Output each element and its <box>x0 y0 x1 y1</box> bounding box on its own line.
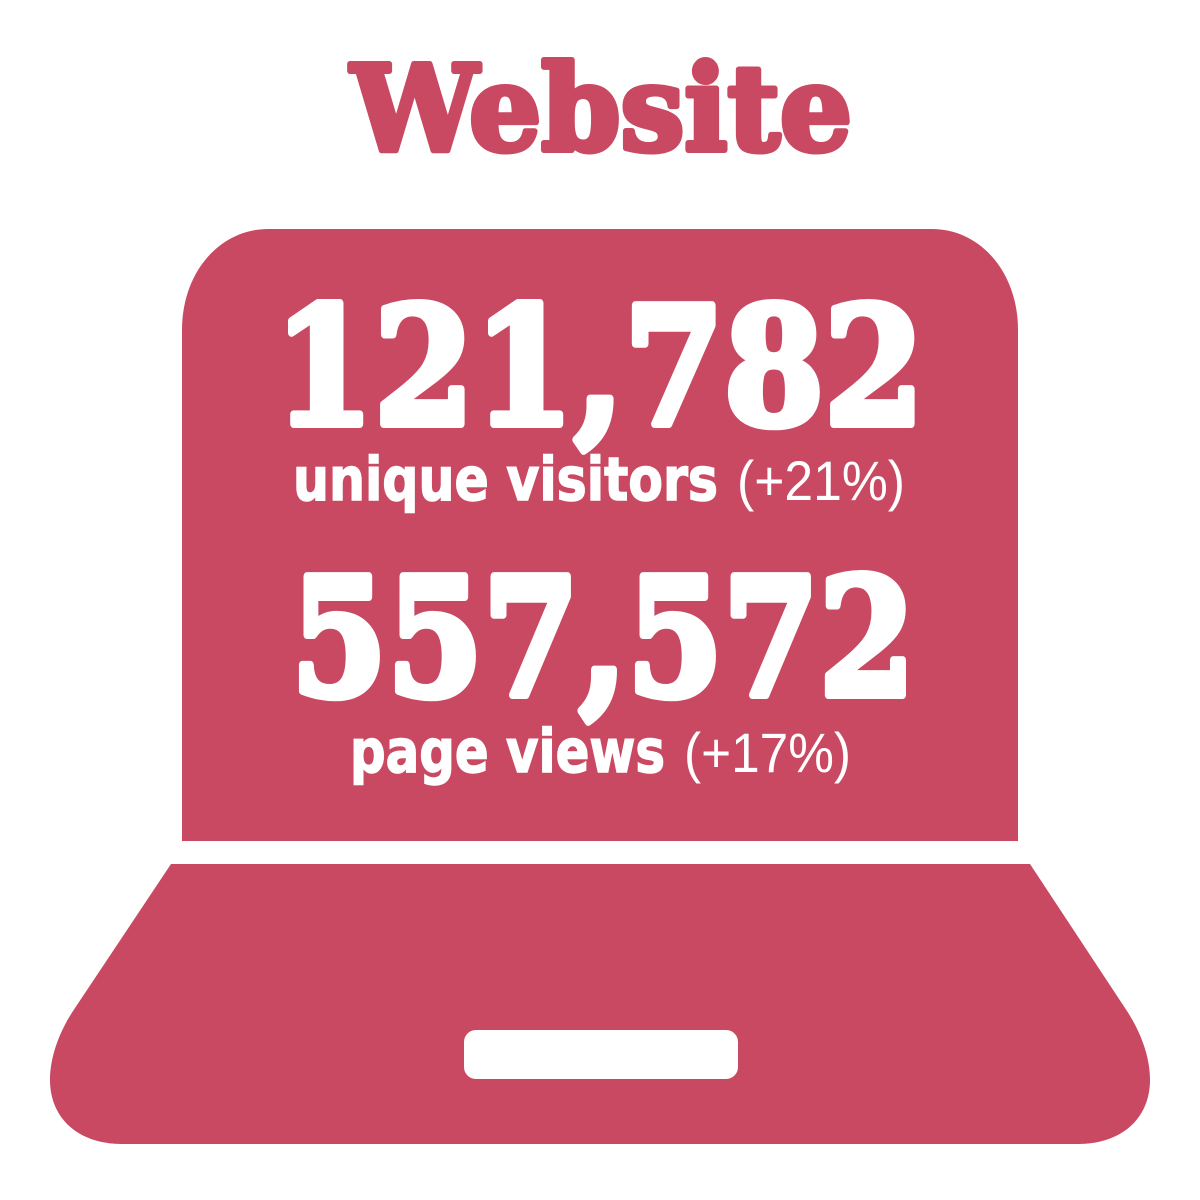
icon: laptop <box>50 229 1150 1144</box>
unique visitors change: (+21%) <box>737 449 905 512</box>
unique visitors label: unique visitors <box>293 445 718 515</box>
unique visitors number: 121,782 <box>274 272 924 463</box>
page views label: page views <box>350 717 665 787</box>
stat: page views <box>291 543 915 787</box>
page views number: 557,572 <box>291 543 915 734</box>
page views change: (+17%) <box>684 721 851 784</box>
laptop base <box>50 864 1150 1144</box>
title: Website <box>349 39 852 178</box>
laptop screen <box>182 229 1018 841</box>
stat: unique visitors <box>274 272 924 515</box>
trackpad <box>464 1030 738 1079</box>
